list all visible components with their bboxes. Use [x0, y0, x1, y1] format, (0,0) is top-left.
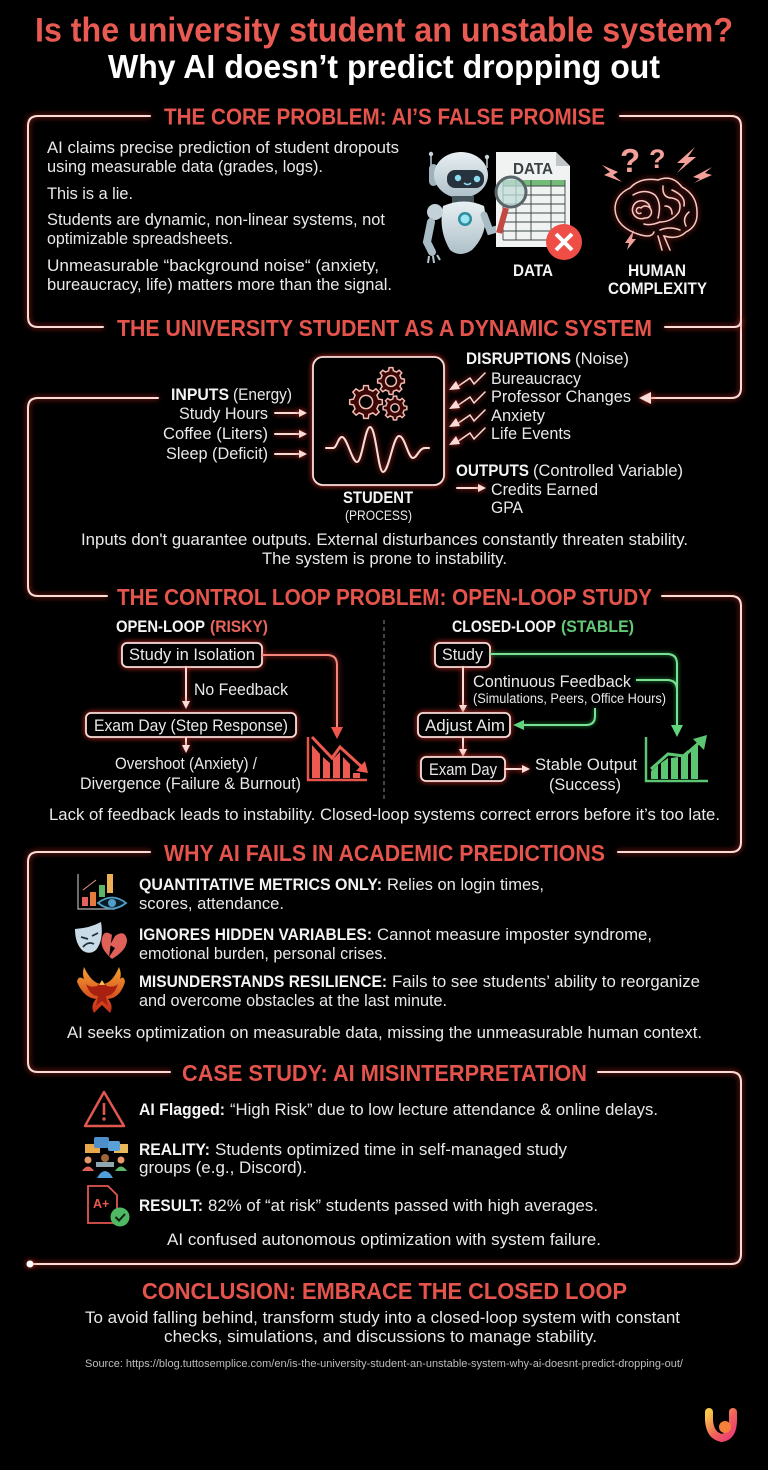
icon: brain with question marks and bolts — [602, 142, 712, 250]
outputs — [456, 461, 683, 517]
list item: hidden variables — [75, 922, 652, 963]
text: continuous feedback: (Simulations, Peers, Office Hours) — [473, 691, 666, 706]
text block: core problem — [47, 138, 399, 294]
box: study: Study — [442, 645, 483, 664]
text block: conclusion — [85, 1308, 680, 1346]
box: adjust aim — [418, 713, 510, 737]
arrow: green feedback to adjust aim — [513, 708, 595, 730]
arrow: output — [457, 484, 486, 492]
text block: core problem: bureaucracy, life) matters more than the signal. — [47, 275, 392, 294]
list item: quantitative metrics — [78, 874, 544, 913]
text: reality: REALITY: — [139, 1140, 210, 1159]
connector: neon frame around core problem — [28, 116, 741, 404]
icon: data spreadsheet with magnifier and red cross — [496, 152, 582, 260]
text: stable output: Stable Output — [535, 755, 637, 774]
heading: closed-loop: CLOSED-LOOP — [452, 617, 556, 636]
heading: conclusion: CONCLUSION: EMBRACE THE CLOSED LOOP — [142, 1278, 627, 1304]
process box: student — [313, 357, 444, 485]
signal wave — [326, 427, 429, 472]
icon: falling chart — [308, 737, 368, 780]
list item: resilience — [77, 967, 700, 1013]
outputs: Credits Earned — [491, 480, 598, 499]
icon: study group — [82, 1137, 128, 1178]
disruptions: DISRUPTIONS — [466, 349, 571, 368]
disruptions: Professor Changes — [491, 387, 631, 406]
heading: control loop: THE CONTROL LOOP PROBLEM: OPEN-LOOP STUDY — [117, 584, 652, 610]
inputs: Coffee (Liters) — [163, 424, 268, 443]
text: reality — [139, 1140, 567, 1177]
arrow: no feedback — [182, 667, 288, 709]
icon: robot — [427, 152, 497, 263]
list item: result — [88, 1186, 598, 1226]
label: data: DATA — [513, 261, 553, 280]
disruptions: Bureaucracy — [491, 369, 581, 388]
text: overshoot: Divergence (Failure & Burnout) — [80, 774, 301, 793]
icon: chart with eye — [78, 874, 126, 909]
outputs: GPA — [491, 498, 524, 517]
heading: open-loop: OPEN-LOOP — [116, 617, 205, 636]
panel: open-loop — [80, 617, 368, 793]
connector: frame around control loop — [618, 596, 741, 852]
arrow: study to adjust — [459, 667, 467, 713]
arrows: inputs — [275, 409, 307, 458]
icon: data spreadsheet with magnifier and red cross: DATA — [513, 161, 553, 178]
text: stable output: (Success) — [549, 775, 621, 794]
title — [35, 12, 733, 85]
label: human complexity — [608, 261, 708, 298]
text: resilience: Fails to see students’ ability to reorganize — [392, 972, 700, 991]
icon: tragedy mask and broken heart — [75, 922, 127, 959]
icon: logo — [709, 1412, 733, 1438]
icon: gears — [350, 368, 407, 420]
text block: core problem: AI claims precise prediction of student dropouts — [47, 138, 399, 157]
text: continuous feedback: Continuous Feedback — [473, 672, 631, 691]
box: adjust aim: Adjust Aim — [425, 716, 505, 735]
box: exam day step response: Exam Day (Step Response) — [94, 716, 288, 735]
arrow: to falling chart — [262, 655, 343, 739]
label: student process: STUDENT — [343, 488, 414, 507]
outputs: OUTPUTS — [456, 461, 529, 480]
disruptions: (Noise) — [575, 349, 629, 368]
text: hidden variables: IGNORES HIDDEN VARIABLES: — [139, 925, 372, 944]
text: quantitative metrics: Relies on login times, — [387, 875, 544, 894]
text block: system summary — [81, 530, 688, 568]
text block: system summary: Inputs don't guarantee outputs. External disturbances constantly threaten stability. — [81, 530, 688, 549]
inputs: INPUTS — [171, 385, 229, 404]
icon: warning triangle — [85, 1092, 124, 1126]
arrow: adjust to exam — [459, 738, 467, 757]
text: quantitative metrics: QUANTITATIVE METRICS ONLY: — [139, 875, 382, 894]
box: study — [435, 643, 490, 667]
title: Is the university student an unstable system? — [35, 12, 733, 50]
label: student process — [343, 488, 414, 523]
outputs: (Controlled Variable) — [533, 461, 683, 480]
icon: rising chart — [646, 735, 708, 781]
label: student process: (PROCESS) — [345, 508, 412, 523]
arrow: to overshoot — [182, 738, 190, 753]
text: quantitative metrics: scores, attendance. — [139, 894, 284, 913]
divider — [383, 620, 385, 800]
text block: core problem: optimizable spreadsheets. — [47, 229, 233, 248]
text: resilience: and overcome obstacles at the last minute. — [139, 991, 447, 1010]
text block: conclusion: checks, simulations, and discussions to manage stability. — [164, 1327, 597, 1346]
text: hidden variables: Cannot measure imposter syndrome, — [377, 925, 652, 944]
text block: loop summary: Lack of feedback leads to instability. Closed-loop systems correct errors before it’s too late. — [49, 805, 720, 824]
heading: dynamic system: THE UNIVERSITY STUDENT AS A DYNAMIC SYSTEM — [117, 315, 652, 341]
list item: AI flagged — [85, 1092, 658, 1126]
label: human complexity: HUMAN — [628, 261, 686, 280]
heading: open-loop — [116, 617, 268, 636]
box: exam day: Exam Day — [429, 760, 497, 779]
text block: system summary: The system is prone to instability. — [262, 549, 507, 568]
text: overshoot — [80, 754, 301, 793]
heading: open-loop: (RISKY) — [210, 617, 268, 636]
inputs: Study Hours — [179, 404, 268, 423]
disruptions: Life Events — [491, 424, 571, 443]
text: stable output — [535, 755, 637, 794]
heading: case study: CASE STUDY: AI MISINTERPRETATION — [182, 1060, 587, 1086]
text: reality: Students optimized time in self-managed study — [215, 1140, 567, 1159]
icon: A+ document with check: A+ — [93, 1197, 109, 1211]
text block: conclusion: To avoid falling behind, transform study into a closed-loop system with constant — [85, 1308, 680, 1327]
text: result: RESULT: — [139, 1196, 203, 1215]
label: human complexity: COMPLEXITY — [608, 279, 708, 298]
inputs: Sleep (Deficit) — [166, 444, 268, 463]
text: quantitative metrics — [139, 875, 544, 913]
text block: case summary: AI confused autonomous optimization with system failure. — [167, 1230, 601, 1249]
text block: core problem: This is a lie. — [47, 184, 133, 203]
icon: brain with question marks and bolts: ? — [649, 144, 666, 174]
text: hidden variables: emotional burden, personal crises. — [139, 944, 387, 963]
text: resilience: MISUNDERSTANDS RESILIENCE: — [139, 972, 387, 991]
inputs — [163, 385, 307, 463]
disruptions — [449, 349, 631, 445]
arrow: to stable output — [505, 765, 530, 773]
arrow: green feedback to chart — [490, 654, 683, 737]
heading: core problem: THE CORE PROBLEM: AI’S FALSE PROMISE — [164, 104, 605, 130]
text: resilience — [139, 972, 700, 1010]
text block: core problem: Students are dynamic, non-linear systems, not — [47, 210, 385, 229]
text: continuous feedback — [473, 672, 666, 706]
heading: why AI fails: WHY AI FAILS IN ACADEMIC PREDICTIONS — [164, 840, 605, 866]
text: overshoot: Overshoot (Anxiety) / — [115, 754, 257, 773]
connector: frame around why AI fails — [28, 852, 170, 1072]
text: reality: groups (e.g., Discord). — [139, 1158, 307, 1177]
heading: closed-loop — [452, 617, 634, 636]
arrows: noise zigzags — [449, 373, 485, 445]
text: hidden variables — [139, 925, 652, 963]
text: AI flagged: “High Risk” due to low lecture attendance & online delays. — [230, 1100, 658, 1119]
box: study in isolation: Study in Isolation — [129, 645, 255, 664]
disruptions: Anxiety — [491, 406, 545, 425]
icon: phoenix — [77, 967, 125, 1013]
panel: closed-loop — [418, 617, 708, 794]
text block: AI fails summary: AI seeks optimization on measurable data, missing the unmeasurable human context. — [67, 1023, 702, 1042]
connector: frame around dynamic system — [28, 398, 158, 596]
heading: closed-loop: (STABLE) — [561, 617, 634, 636]
title: Why AI doesn’t predict dropping out — [108, 48, 660, 85]
icon: brain with question marks and bolts: ? — [620, 142, 640, 179]
text: AI flagged: AI Flagged: — [139, 1100, 225, 1119]
connector: frame around case study — [26, 1072, 741, 1268]
arrow: no feedback: No Feedback — [194, 680, 288, 699]
text block: core problem: using measurable data (grades, logs). — [47, 157, 323, 176]
source line: Source: https://blog.tuttosemplice.com/en/is-the-university-student-an-unstable-system-why-ai-doesnt-predict-dropping-out/ — [85, 1358, 684, 1370]
icon: A+ document with check — [88, 1186, 130, 1226]
text block: core problem: Unmeasurable “background noise“ (anxiety, — [47, 256, 379, 275]
inputs: (Energy) — [233, 385, 292, 404]
text: result: 82% of “at risk” students passed with high averages. — [208, 1196, 598, 1215]
list item: reality — [82, 1137, 567, 1178]
